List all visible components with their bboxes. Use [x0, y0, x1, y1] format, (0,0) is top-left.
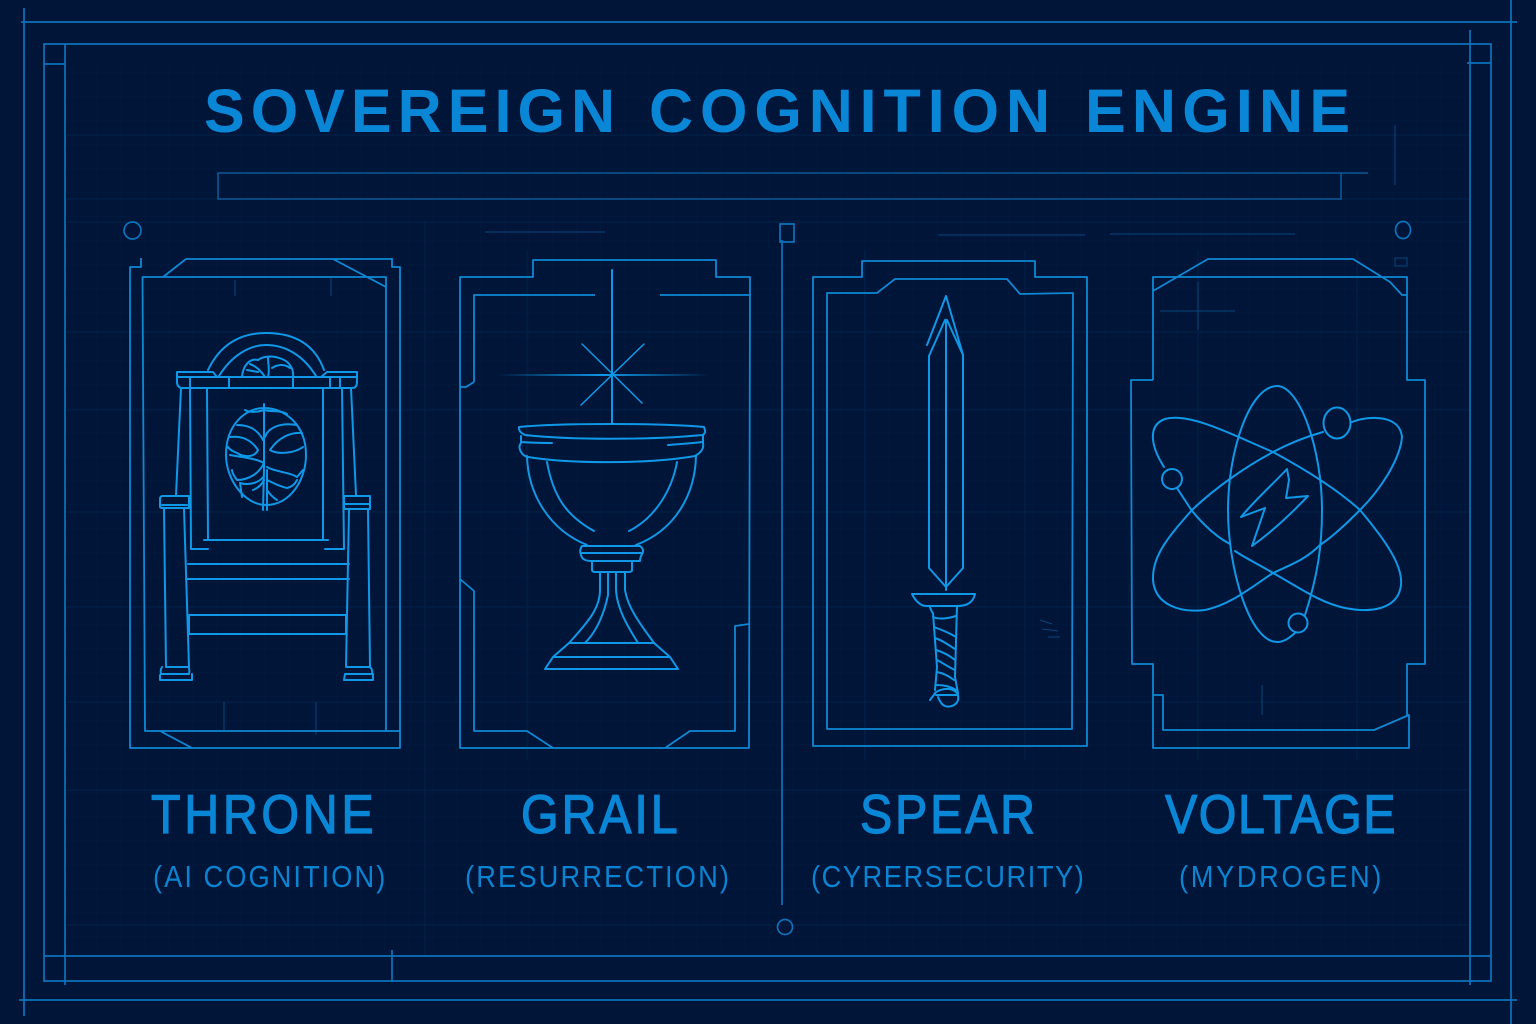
icon: grail — [519, 424, 705, 669]
throne card frame — [130, 258, 400, 748]
label: voltage — [1165, 783, 1396, 894]
label: voltage: VOLTAGE — [1165, 783, 1396, 845]
icon: throne — [160, 333, 373, 680]
label: spear — [811, 783, 1084, 894]
title: ENGINE — [1085, 77, 1350, 145]
spear card frame — [813, 261, 1087, 746]
title: COGNITION — [649, 77, 1050, 145]
icon: sword — [912, 296, 975, 707]
title — [204, 77, 1350, 145]
panel: throne — [130, 258, 400, 748]
registration circles — [124, 222, 1410, 934]
label: throne — [151, 783, 385, 894]
icon: star — [497, 270, 710, 424]
panel: voltage — [1131, 259, 1425, 748]
icon: lightning bolt — [1241, 469, 1308, 546]
label: spear: (CYRERSECURITY) — [811, 860, 1084, 894]
label: throne: THRONE — [151, 783, 374, 845]
label: grail — [465, 783, 729, 894]
panel: grail — [460, 260, 750, 748]
label: spear: SPEAR — [860, 783, 1035, 845]
icon: atom — [1153, 386, 1402, 642]
grail card frame — [460, 260, 750, 748]
electrons — [1162, 408, 1350, 632]
title: SOVEREIGN — [204, 77, 615, 145]
panel: spear — [813, 261, 1087, 746]
label: voltage: (MYDROGEN) — [1179, 860, 1381, 894]
icon: brain — [226, 356, 306, 510]
voltage card frame — [1131, 259, 1425, 748]
label: throne: (AI COGNITION) — [153, 860, 385, 894]
label: grail: (RESURRECTION) — [465, 860, 729, 894]
label: grail: GRAIL — [521, 783, 678, 845]
title plate — [218, 173, 1368, 199]
